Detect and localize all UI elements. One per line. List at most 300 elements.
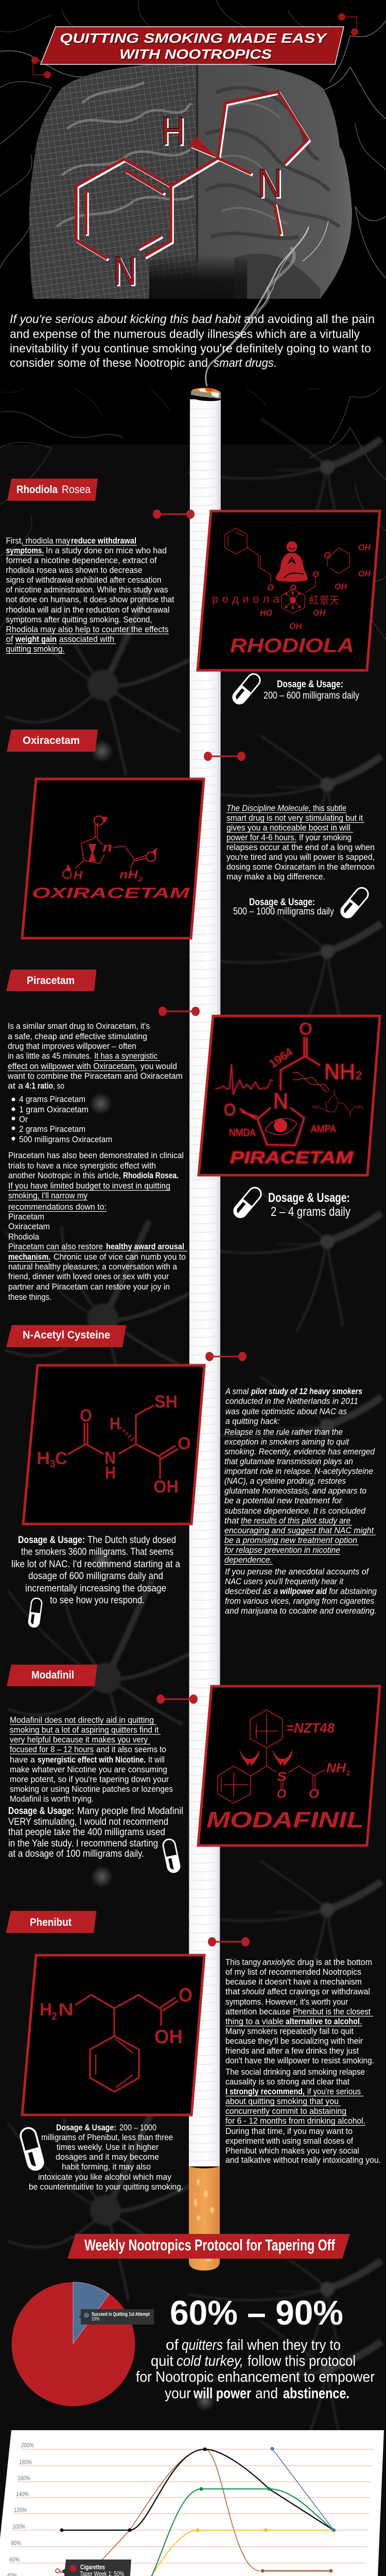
pie tooltip: 10% <box>92 2316 99 2322</box>
text: NAC study: from various vices, ranging from cigarettes <box>225 1597 374 1606</box>
dosage: Modafinil: in the Yale study. I recommend starting <box>8 1838 158 1849</box>
panel: Modafinil molecule: O <box>277 1787 287 1801</box>
text: Modafinil description: more potent, so if you're tapering down your <box>10 1775 169 1784</box>
text: Oxiracetam description: this subtle <box>313 804 346 813</box>
text: Phenibut description: This tangy <box>225 1958 261 1967</box>
line chart panel: 100% <box>12 2523 25 2530</box>
text: NAC study: conducted in the Netherlands in 2011 <box>225 1397 358 1406</box>
text: Rhodiola description: formed a nicotine dependence, extract of <box>6 556 157 565</box>
banner: Weekly Nootropics Protocol <box>67 2234 350 2259</box>
text: Phenibut description: affect cravings or withdrawal <box>267 1987 370 1996</box>
title banner: WITH NOOTROPICS <box>119 46 272 62</box>
dosage: Modafinil: that people take the 400 milligrams used <box>8 1827 165 1838</box>
text: Modafinil description: It will <box>148 1755 165 1765</box>
text: quitters statistic: will power <box>193 2385 251 2402</box>
text: Rhodiola description <box>6 536 174 654</box>
text: Piracetam description: , so <box>53 1081 64 1091</box>
text: Phenibut description: if you're serious <box>307 2087 361 2096</box>
text: Piracetam description: 1 gram Oxiracetam <box>19 1105 89 1114</box>
text: Piracetam description: a safe, cheap and effective stimulating <box>8 1032 147 1041</box>
text: Modafinil description: Modafinil does not directly aid in quitting <box>10 1716 154 1725</box>
nicotine molecule: N <box>257 160 282 206</box>
intro text: consider some of these Nootropic and <box>10 356 208 369</box>
text: Rhodiola description: symptoms after quitting smoking. Second, <box>6 615 152 624</box>
text: Phenibut description: should <box>242 1987 265 1996</box>
text: Piracetam description <box>7 1022 187 1302</box>
text: Phenibut description: causality is so strong and clear that <box>225 2077 349 2087</box>
line chart panel: 180% <box>19 2459 32 2466</box>
text: Oxiracetam description: The Discipline Molecule, <box>226 804 311 813</box>
text: NAC study: be a potential new treatment for <box>224 1496 342 1505</box>
text: NAC study: A smal <box>225 1387 249 1396</box>
icon: eye <box>265 1118 297 1134</box>
text: Piracetam description: Piracetam <box>8 1212 44 1222</box>
icon: pill <box>339 885 371 920</box>
text: quitters statistic: quit <box>151 2353 173 2369</box>
text: Piracetam description: effect on willpower with Oxiracetam, <box>8 1062 137 1071</box>
text: Phenibut description: because they'll be socializing with their <box>225 2037 363 2046</box>
text: NAC study: described as a <box>225 1587 278 1596</box>
icon: pill <box>162 1838 181 1873</box>
text: Modafinil description: smoking or using Nicotine patches or lozenges <box>10 1785 173 1794</box>
text: NAC study: that glutamate transmission plays an <box>224 1457 353 1466</box>
text: Piracetam description: at a <box>8 1081 24 1091</box>
text: Modafinil description: very helpful because it makes you very <box>10 1735 148 1744</box>
text: NAC study: (NAC), a cysteine prodrug, restores <box>224 1477 346 1486</box>
panel: NAC molecule: N <box>104 1448 116 1468</box>
panel: Phenibut molecule: H <box>40 2000 52 2020</box>
text: Piracetam description: Chronic use of vice can numb you to <box>54 1252 186 1262</box>
smoke wisp <box>206 221 328 386</box>
text: Piracetam description: Oxiracetam <box>8 1222 50 1231</box>
text: Phenibut description: of my list of recommended Nootropics <box>225 1968 361 1977</box>
text: Oxiracetam description: gives you a noticeable boost in will <box>226 823 350 833</box>
panel: Modafinil molecule: S <box>277 1770 287 1784</box>
panel: Phenibut molecule: N <box>58 2000 74 2020</box>
text: Phenibut description: thing to a viable <box>225 2017 284 2026</box>
panel: NAC molecule: H <box>110 1414 120 1434</box>
intro text <box>10 312 375 369</box>
text: Phenibut description: concurrently commit to abstaining <box>225 2107 346 2116</box>
text: NAC study: a quitting hack: <box>225 1417 280 1426</box>
text: Piracetam description: It has a synergistic <box>94 1052 157 1061</box>
text: Piracetam description: drug that improves willpower – often <box>8 1042 136 1051</box>
text: Phenibut description: Phenibut is the closest <box>293 2007 371 2016</box>
panel: Modafinil molecule: O <box>309 1787 320 1801</box>
pie tooltip <box>79 2309 154 2325</box>
text: NAC study: pilot study of 12 heavy smokers <box>251 1387 362 1396</box>
intro text: smart drugs. <box>214 356 277 369</box>
text: Piracetam description: mechanism. <box>8 1252 50 1262</box>
panel: Rhodiola molecule: OH <box>358 543 371 552</box>
text: NAC study: for abstaining <box>329 1587 377 1596</box>
text: Rhodiola description: Rhodiola may also help to counter the effects <box>6 625 169 634</box>
panel: Oxiracetam molecule: 2 <box>137 876 143 883</box>
panel: NAC molecule: O <box>178 1434 191 1453</box>
text: Piracetam description: you would <box>141 1062 177 1071</box>
text: Rhodiola description: symptoms. <box>6 546 44 555</box>
connector: Oxiracetam <box>204 752 245 761</box>
panel: NAC molecule: SH <box>154 1392 178 1412</box>
panel: Phenibut molecule: 2 <box>51 2011 57 2022</box>
text: Phenibut description: anxiolytic <box>262 1958 295 1967</box>
text: Oxiracetam description <box>226 804 375 882</box>
line chart panel: 120% <box>14 2506 27 2514</box>
section badge: N-Acetyl Cysteine: N-Acetyl Cysteine <box>23 1329 110 1341</box>
panel: Phenibut molecule <box>22 1955 204 2115</box>
text: Piracetam description: partner and Piracetam can restore your joy in <box>8 1282 170 1292</box>
text: Piracetam description: Rhodiola Rosea. <box>123 1171 179 1180</box>
dosage: Phenibut: milligrams of Phenibut, less than three <box>41 2133 173 2142</box>
panel: NAC molecule: OH <box>153 1477 179 1497</box>
panel: Rhodiola molecule: O <box>290 583 296 592</box>
text: Modafinil description: make whatever Nicotine you are consuming <box>10 1765 167 1774</box>
dosage: Modafinil: Many people find Modafinil <box>77 1806 183 1817</box>
text: Piracetam description: these things. <box>8 1293 51 1302</box>
series: Piracetam <box>60 2447 334 2532</box>
panel: Modafinil molecule: 2 <box>346 1769 350 1777</box>
panel: NAC molecule: C <box>55 1449 67 1468</box>
section badge: Phenibut <box>6 1911 97 1933</box>
series: NAC <box>51 2487 334 2576</box>
connector: Modafinil <box>156 1694 198 1704</box>
text: Rhodiola description: not done on humans, it does show promise that <box>6 595 174 604</box>
text: Phenibut description: Phenibut which makes you very social <box>225 2146 359 2156</box>
section badge: Rhodiola Rosea <box>7 479 98 501</box>
text: quitters statistic: fail when they try to <box>226 2337 341 2353</box>
pie chart <box>11 2282 154 2406</box>
text: Oxiracetam description: dosing some Oxiracetam in the afternoon <box>226 862 375 872</box>
text: Modafinil description <box>10 1716 173 1804</box>
panel: Oxiracetam molecule: nH <box>119 868 138 881</box>
dosage: Modafinil: VERY stimulating, I would not recommend <box>8 1817 168 1827</box>
text: Piracetam description: recommendations down to: <box>8 1202 107 1212</box>
section badge: Modafinil <box>7 1665 97 1686</box>
text: Piracetam description: If you have limited budget to invest in quitting <box>8 1181 170 1191</box>
panel: Modafinil molecule: =NZT48 <box>286 1720 335 1736</box>
line chart panel: 60% <box>9 2556 20 2563</box>
intro text: inevitability if you continue smoking you're definitely going to want to <box>10 342 371 355</box>
text: Piracetam description: 4 grams Piracetam <box>19 1095 85 1104</box>
text: Oxiracetam description: you're tired and you will power is sapped, <box>226 853 375 862</box>
text: NAC study: substance dependence. It is concluded <box>224 1506 366 1516</box>
panel: NAC molecule <box>23 1365 204 1524</box>
connector: NAC <box>205 1352 247 1361</box>
text: Oxiracetam description: If your smoking <box>299 833 352 842</box>
line chart panel: 200% <box>21 2442 34 2449</box>
text: Phenibut description: don't have the willpower to resist smoking. <box>225 2056 374 2065</box>
text: Piracetam description: Rhodiola <box>8 1232 40 1242</box>
text: Rhodiola description: rhodiola rosea was shown to decrease <box>6 566 142 575</box>
panel: NAC molecule: O <box>80 1406 92 1426</box>
text: Rhodiola description: associated with <box>59 635 114 644</box>
text: quitters statistic: of <box>166 2337 179 2353</box>
text: Piracetam description: natural healthy pleasures; a conversation with a <box>8 1262 178 1272</box>
text: quitters statistic: follow this protocol <box>248 2353 356 2369</box>
text: Phenibut description: I strongly recommend, <box>225 2087 305 2096</box>
line chart panel <box>0 2430 384 2576</box>
panel: Rhodiola molecule: OH <box>358 569 371 579</box>
text: Phenibut description: alternative to alcohol <box>286 2017 360 2026</box>
text: Piracetam description: want to combine the Piracetam and Oxiracetam <box>7 1072 183 1081</box>
panel: Rhodiola molecule: HO <box>260 608 272 618</box>
panel: Modafinil molecule: NH <box>326 1761 346 1775</box>
text: Piracetam description: Is a similar smart drug to Oxiracetam, it's <box>8 1022 150 1031</box>
text: NAC study: smoking. Recently, evidence has emerged <box>224 1447 375 1456</box>
connector: Piracetam <box>159 1007 200 1016</box>
text: NAC study: important role in relapse. N-acetylcysteine <box>224 1467 373 1476</box>
text: Phenibut description: . <box>360 2017 362 2026</box>
text: Rhodiola description: quitting smoking. <box>6 645 65 654</box>
section badge: Modafinil: Modafinil <box>31 1669 74 1681</box>
text: Phenibut description: Many smokers repeatedly fail to quit <box>225 2027 354 2036</box>
chart tooltip <box>62 2560 131 2576</box>
text: Piracetam description: friend, dinner with loved ones or sex with your <box>8 1272 169 1281</box>
panel: NAC molecule: H <box>105 1463 116 1483</box>
text: NAC study: for relapse prevention in nicotine <box>224 1546 340 1555</box>
text: Phenibut description: attention because <box>225 2007 290 2016</box>
icon: meditating figure <box>276 541 308 582</box>
panel: Oxiracetam molecule <box>22 779 204 938</box>
text: Modafinil description: have a <box>10 1755 36 1765</box>
intro text: and expense of the numerous deadly illnesses which are a virtually <box>10 327 360 341</box>
dosage: NAC: like lot of NAC. I'd recommend starting at a <box>11 1559 180 1570</box>
text: quitters statistic: abstinence. <box>283 2385 349 2402</box>
panel: Piracetam molecule: 1964 <box>267 1045 295 1071</box>
text: Phenibut description: that <box>225 1987 240 1996</box>
text: Rhodiola description: of nicotine administration. While this study was <box>6 585 168 595</box>
text: Rhodiola description: of <box>6 635 13 644</box>
panel: Rhodiola molecule: OH <box>313 608 326 618</box>
dosage: Modafinil: at a dosage of 100 milligrams daily. <box>8 1849 144 1859</box>
dosage: Piracetam <box>268 1191 350 1219</box>
text: Oxiracetam description: smart drug is not very stimulating but it <box>226 814 363 823</box>
nicotine molecule: N <box>113 248 136 293</box>
panel: Rhodiola molecule: OH <box>335 582 347 591</box>
panel: Rhodiola molecule: 紅景天 <box>309 592 340 607</box>
icon: pill <box>19 2126 45 2172</box>
text: Piracetam description: Piracetam can also restore <box>8 1242 103 1251</box>
text: Phenibut description: During that time, if you may want to <box>225 2127 353 2136</box>
text: Modafinil description: and it also seems to <box>96 1745 166 1754</box>
panel: Piracetam molecule: HO <box>312 1105 319 1110</box>
text: quitters statistic: your <box>165 2385 191 2402</box>
text: NAC study: NAC users you'll frequently hear it <box>225 1577 344 1586</box>
text: Phenibut description: and talkative without really intoxicating you. <box>225 2156 381 2165</box>
text: Piracetam description: trials to have a nice synergistic effect with <box>8 1161 156 1171</box>
panel: Piracetam molecule <box>199 1016 380 1175</box>
text: Phenibut description <box>225 1958 381 2165</box>
panel: Rhodiola molecule <box>198 511 380 670</box>
icon: DNA <box>293 1072 330 1092</box>
line chart panel: 160% <box>17 2475 30 2482</box>
text: NAC study: dependence. <box>224 1555 272 1565</box>
text: Oxiracetam description: may make a big difference. <box>226 872 325 882</box>
dosage: Phenibut: times weekly. Use it in higher <box>57 2143 159 2152</box>
text: quitters statistic: cold turkey, <box>177 2353 243 2369</box>
text: NAC study: If you peruse the anecdotal accounts of <box>225 1567 370 1577</box>
section badge: Oxiracetam: Oxiracetam <box>23 735 80 747</box>
panel: Piracetam molecule: NMDA <box>229 1127 256 1139</box>
connector: Phenibut <box>208 1937 250 1946</box>
text: NAC study: be a promising new treatment option <box>224 1536 357 1545</box>
panel: Oxiracetam molecule: H <box>74 869 83 882</box>
section badge: Oxiracetam <box>7 730 98 752</box>
nicotine molecule <box>76 92 308 293</box>
panel: NAC molecule: H <box>37 1449 50 1468</box>
panel: Piracetam molecule: O <box>300 1020 312 1038</box>
dosage: Phenibut: dosages and it may become <box>56 2153 159 2162</box>
intro text: If you're serious about kicking this bad habit <box>10 312 242 326</box>
text: NAC study: Relapse is the rule rather than the <box>224 1428 343 1437</box>
text: NAC study: the results of this pilot study are <box>241 1516 350 1526</box>
panel: Phenibut molecule: OH <box>154 2026 183 2048</box>
connector: Rhodiola <box>153 510 195 519</box>
icon: pill <box>28 1598 42 1628</box>
series: Oxiracetam <box>122 2529 334 2576</box>
text: Rhodiola description: rhodiola will aid in the reduction of withdrawal <box>6 605 170 615</box>
text: Piracetam description: 2 grams Piracetam <box>19 1125 85 1134</box>
text: NAC study: willpower aid <box>280 1587 327 1596</box>
title circuit nodes <box>31 13 358 78</box>
dosage: Rhodiola <box>264 679 359 701</box>
text: Phenibut description: because it doesn't have a mechanism <box>225 1977 362 1987</box>
dosage: Rhodiola: Dosage & Usage: <box>277 679 343 690</box>
section badge: Rhodiola Rosea: Rhodiola <box>16 484 58 496</box>
dosage: Rhodiola: 200 – 600 milligrams daily <box>264 690 359 701</box>
dosage: NAC: to see how you respond. <box>50 1595 145 1606</box>
text: Oxiracetam description: power for 4-6 hours. <box>226 833 296 842</box>
text: Modafinil description: focused for 8 – 12 hours <box>10 1745 94 1754</box>
text: quitters statistic: and <box>255 2385 278 2402</box>
text: Modafinil description: Modafinil is worth trying. <box>10 1794 94 1804</box>
text: Phenibut description: symptoms. However, it's worth your <box>225 1997 348 2007</box>
panel: Piracetam molecule: NH <box>324 1059 355 1084</box>
line chart panel: 140% <box>16 2490 29 2498</box>
dosage: NAC <box>11 1535 180 1606</box>
panel: Rhodiola molecule: O <box>267 583 274 592</box>
section badge: N-Acetyl Cysteine <box>6 1325 126 1347</box>
text: Rhodiola description: signs of withdrawal exhibited after cessation <box>6 575 162 585</box>
dosage: Phenibut: intoxicate you like alcohol which may <box>38 2173 172 2182</box>
text: Rhodiola description: In a study done on mice who had <box>46 546 167 555</box>
dosage: NAC: incrementally increasing the dosage <box>25 1583 166 1594</box>
panel: Rhodiola molecule: OH <box>289 621 302 631</box>
text: Phenibut description: friends and after a few drinks they just <box>225 2046 359 2056</box>
section badge: Phenibut: Phenibut <box>30 1917 72 1928</box>
series: Nicotine <box>271 2447 336 2532</box>
icon: pill <box>232 1185 264 1220</box>
text: Piracetam description: 4:1 ratio <box>25 1081 53 1091</box>
text: NAC study: encouraging and suggest that NAC might <box>224 1526 374 1535</box>
dosage: Oxiracetam: 500 – 1000 milligrams daily <box>233 906 334 917</box>
dosage: NAC: dosage of 600 milligrams daily and <box>28 1571 163 1582</box>
text: Piracetam description: in as little as 45 minutes. <box>8 1052 92 1061</box>
text: Piracetam description: smoking, I'll narrow my <box>8 1191 88 1200</box>
dosage: Phenibut: habit forming, it may also <box>62 2162 151 2172</box>
text: Phenibut description: about quitting smoking that you <box>225 2097 339 2106</box>
dosage: Phenibut: be counterintuitive to your quitting smoking. <box>29 2182 183 2192</box>
text: Piracetam description: Piracetam has also been demonstrated in clinical <box>8 1151 184 1160</box>
chart tooltip: Cigarettes <box>80 2563 105 2571</box>
text: Piracetam description: another Nootropic in this article, <box>8 1171 121 1180</box>
text: Oxiracetam description: relapses occur at the end of a long when <box>226 843 375 852</box>
series: Cigarettes <box>56 2569 329 2576</box>
text: Modafinil description: smoking but a lot of aspiring quitters find it <box>10 1725 159 1735</box>
section badge: Piracetam <box>6 970 97 991</box>
text: Rhodiola description: weight gain <box>15 635 57 644</box>
panel: Piracetam molecule: 2 <box>356 1069 362 1082</box>
intro dark band <box>0 299 386 388</box>
panel: Rhodiola molecule: O <box>324 550 330 560</box>
panel: Oxiracetam molecule: n <box>102 839 112 855</box>
panel: Phenibut molecule: O <box>179 1985 192 2006</box>
dosage: Phenibut <box>29 2123 183 2192</box>
panel: NAC molecule: 3 <box>50 1459 56 1470</box>
text: NAC study: that <box>224 1516 239 1526</box>
dosage: Modafinil: Dosage & Usage: <box>8 1806 74 1817</box>
text: NAC study: and marijuana to cocaine and overeating. <box>225 1606 377 1616</box>
text: Piracetam description: healthy award arousal <box>106 1242 184 1251</box>
dosage: Oxiracetam: Dosage & Usage: <box>249 897 315 908</box>
text: Phenibut description: drug is at the bottom <box>297 1958 372 1967</box>
panel: Piracetam molecule: O <box>224 1100 236 1119</box>
line chart panel: 80% <box>11 2539 21 2547</box>
dosage: Phenibut: Dosage & Usage: <box>56 2123 116 2132</box>
section badge: Piracetam: Piracetam <box>27 975 75 987</box>
statistic: 60% – 90%: 60% – 90% <box>170 2294 343 2332</box>
dosage: Phenibut: 200 – 1000 <box>119 2123 156 2132</box>
text: Phenibut description: for 6 - 12 months from drinking alcohol. <box>225 2116 365 2126</box>
panel: Rhodiola molecule: родиола <box>212 592 280 605</box>
section badge: Rhodiola Rosea: Rosea <box>62 484 91 496</box>
panel: Modafinil molecule <box>198 1686 380 1845</box>
nicotine molecule: H <box>161 109 185 153</box>
panel: Rhodiola molecule: O <box>312 569 319 579</box>
text: quitters statistic <box>136 2337 375 2402</box>
text: NAC study: was quite optimistic about NAC as <box>225 1407 347 1416</box>
dosage: Modafinil <box>8 1806 183 1859</box>
dosage: NAC: the smokers 3600 milligrams. That seems <box>21 1547 173 1557</box>
title banner: QUITTING SMOKING MADE EASY <box>60 30 328 46</box>
panel: Modafinil molecule: MODAFINIL <box>206 1807 364 1833</box>
text: Phenibut description: The social drinking and smoking relapse <box>225 2067 365 2077</box>
title banner <box>41 27 344 64</box>
dosage: Piracetam: Dosage & Usage: <box>268 1191 350 1205</box>
text: Phenibut description: experiment with using small doses of <box>225 2137 353 2146</box>
brain illustration <box>0 63 386 299</box>
icon: pill <box>231 671 262 706</box>
dosage: Oxiracetam <box>233 897 334 917</box>
pie tooltip: Succeed in Quitting 1st Attempt <box>92 2312 150 2317</box>
series: Rhodiola <box>54 2449 332 2576</box>
text: Rhodiola description: reduce withdrawal <box>71 536 136 546</box>
panel: Rhodiola molecule: RHODIOLA <box>230 635 354 657</box>
panel: Piracetam molecule: N <box>273 1089 288 1114</box>
text: quitters statistic: quitters <box>182 2337 223 2353</box>
text: Modafinil description: synergistic effect with Nicotine. <box>38 1755 146 1765</box>
intro text: and avoiding all the pain <box>244 312 375 326</box>
panel: Piracetam molecule: PIRACETAM <box>230 1148 354 1167</box>
cigarette <box>189 388 221 2270</box>
panel: Piracetam molecule: AMPA <box>311 1124 337 1135</box>
dosage: NAC: The Dutch study dosed <box>87 1535 176 1546</box>
dosage: Piracetam: 2 – 4 grams daily <box>271 1205 350 1219</box>
text: Piracetam description: 500 milligrams Oxiracetam <box>19 1135 112 1144</box>
text: Rhodiola description: First, rhodiola may <box>6 536 71 546</box>
text: Piracetam description: Or <box>19 1115 28 1124</box>
text: NAC study <box>224 1387 377 1616</box>
